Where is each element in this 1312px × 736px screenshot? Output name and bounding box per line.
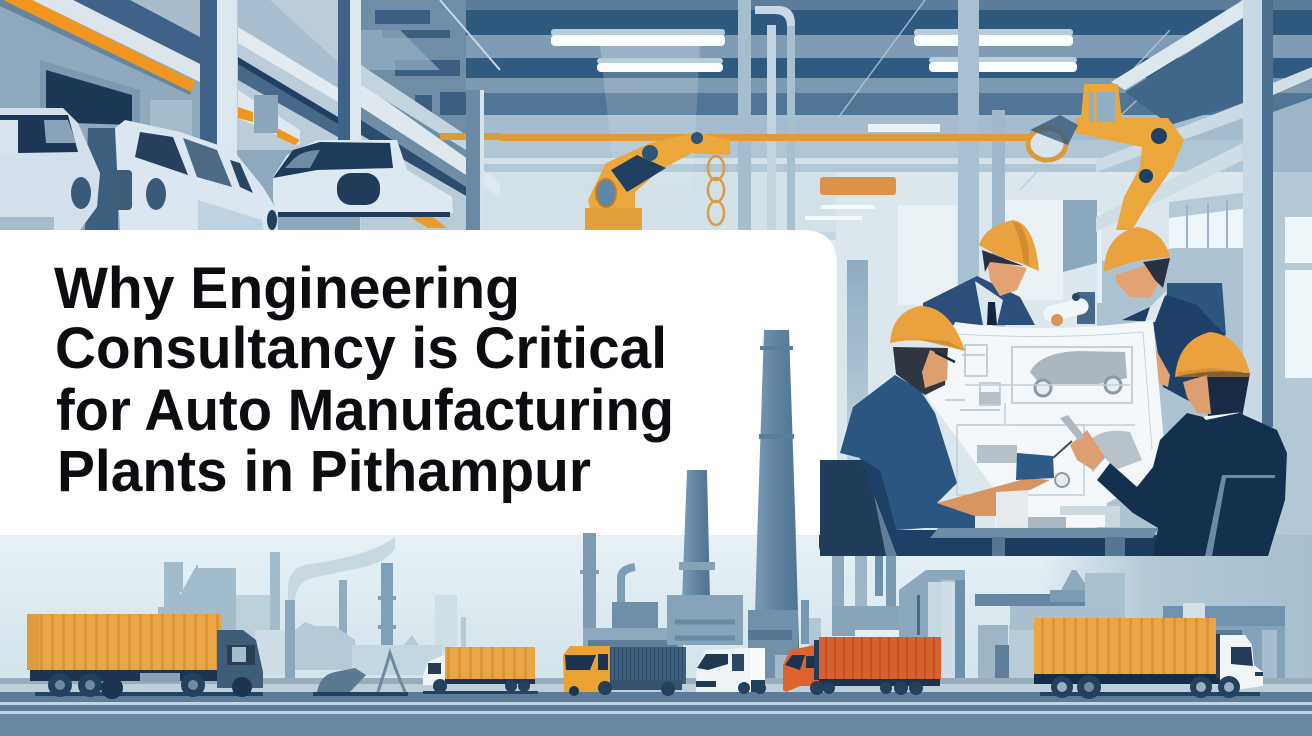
car 1 xyxy=(0,108,100,230)
road xyxy=(0,678,1312,736)
diagonal bracing xyxy=(838,0,1243,190)
truck: far right yellow container xyxy=(1034,618,1263,699)
car 3 xyxy=(273,140,453,217)
chair: front right xyxy=(1205,475,1275,556)
car bodies on assembly line xyxy=(0,108,453,230)
wall behind engineers xyxy=(836,172,1312,542)
chair: back right xyxy=(1167,283,1226,335)
blueprint sheet xyxy=(927,320,1165,528)
chain xyxy=(708,156,724,225)
vertical pipes xyxy=(738,0,1273,427)
title xyxy=(54,256,674,504)
title: Consultancy is Critical xyxy=(55,316,667,381)
device xyxy=(1042,292,1095,326)
tablet xyxy=(1016,453,1054,480)
machinery silhouette xyxy=(313,653,408,696)
light shafts xyxy=(600,46,700,230)
gap between cars xyxy=(85,128,118,230)
title: Why Engineering xyxy=(54,256,520,321)
background: factory interior xyxy=(0,0,1312,542)
engineers reviewing blueprint xyxy=(819,220,1287,556)
engineer: front right xyxy=(1053,332,1287,556)
distant skyline: left xyxy=(158,537,466,678)
robot arm: right xyxy=(1028,84,1184,230)
table top xyxy=(930,528,1158,556)
truck: white van xyxy=(696,648,766,694)
left structural beams xyxy=(0,0,500,230)
right-side buildings xyxy=(832,556,1285,680)
title: Plants in Pithampur xyxy=(57,439,591,504)
hanging orange crate xyxy=(820,177,896,195)
foreground plant and chimneys xyxy=(580,330,835,680)
trucks convoy xyxy=(27,614,1263,699)
truck: small yellow xyxy=(423,647,538,694)
table base xyxy=(819,535,1270,556)
truck: far left yellow container xyxy=(27,614,263,699)
orange overhead pipe xyxy=(500,134,1060,141)
title: for Auto Manufacturing xyxy=(56,378,674,443)
ceiling lights xyxy=(551,29,1077,220)
engineer: front left xyxy=(840,306,1050,556)
engineer: back right xyxy=(1104,227,1243,420)
robot arm: center xyxy=(585,132,730,230)
truck: red container xyxy=(783,637,941,695)
white title panel xyxy=(0,230,837,535)
lower background band xyxy=(0,535,1312,685)
car 2 xyxy=(113,120,278,230)
engineer: back left xyxy=(923,220,1039,325)
chair: front left xyxy=(820,460,897,556)
truck: orange cab, dark box xyxy=(563,646,686,696)
